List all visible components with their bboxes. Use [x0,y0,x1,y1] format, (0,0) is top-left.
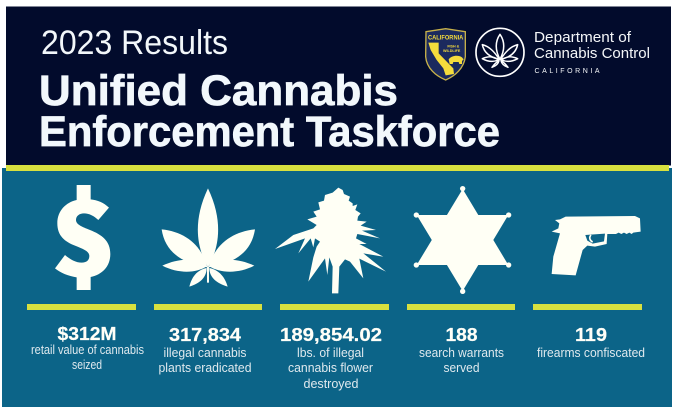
stat: firearms confiscated [533,304,645,360]
logo: Department of Cannabis Control emblem [476,28,524,76]
stat: flower destroyed: lbs. of illegal [297,346,364,360]
stat: plants eradicated: illegal cannabis [164,346,246,360]
stat: plants eradicated [154,304,262,375]
stat: plants eradicated: 317,834 [169,324,242,345]
panel: header background [6,6,671,166]
subtitle: 2023 Results [41,24,228,62]
logo text: Department of Cannabis Control California: Department of [534,30,632,46]
stat: search warrants: served [444,361,480,375]
stat: flower destroyed: 189,854.02 [280,324,382,345]
logo text: Department of Cannabis Control California: CALIFORNIA [534,68,600,75]
stat: retail value [27,304,144,372]
icon: cannabis leaf [162,188,255,287]
icon: sheriff star [414,186,511,294]
logo: California Fish and Wildlife shield: CALIFORNIA [428,35,463,42]
logo: California Fish and Wildlife shield [426,29,465,80]
stat: flower destroyed: destroyed [304,377,359,391]
stat: firearms confiscated: firearms confiscated [537,346,645,360]
title [39,67,500,156]
icon: handgun [552,216,641,275]
icon: cannabis flower [275,188,386,293]
stat: firearms confiscated: 119 [575,324,607,345]
stat: flower destroyed [280,304,389,391]
logo text: Department of Cannabis Control California [534,30,650,75]
icon: dollar sign [55,185,110,290]
stat: retail value: seized [72,358,102,372]
logo text: Department of Cannabis Control California: Cannabis Control [534,46,650,62]
title: Enforcement Taskforce [39,108,500,156]
stat: retail value: retail value of cannabis [31,343,144,357]
logo: California Fish and Wildlife shield: FISH & [447,45,460,49]
stat: search warrants: 188 [446,324,478,345]
stat: retail value: $312M [58,323,116,344]
stat: search warrants: search warrants [419,346,504,360]
stat: flower destroyed: cannabis flower [288,361,373,375]
panel: stats background [2,168,672,407]
accent line under header [6,165,669,171]
stat: plants eradicated: plants eradicated [158,361,252,375]
title: Unified Cannabis [39,67,398,115]
logo: California Fish and Wildlife shield: WILDLIFE [443,49,461,53]
stat: search warrants [407,304,515,375]
